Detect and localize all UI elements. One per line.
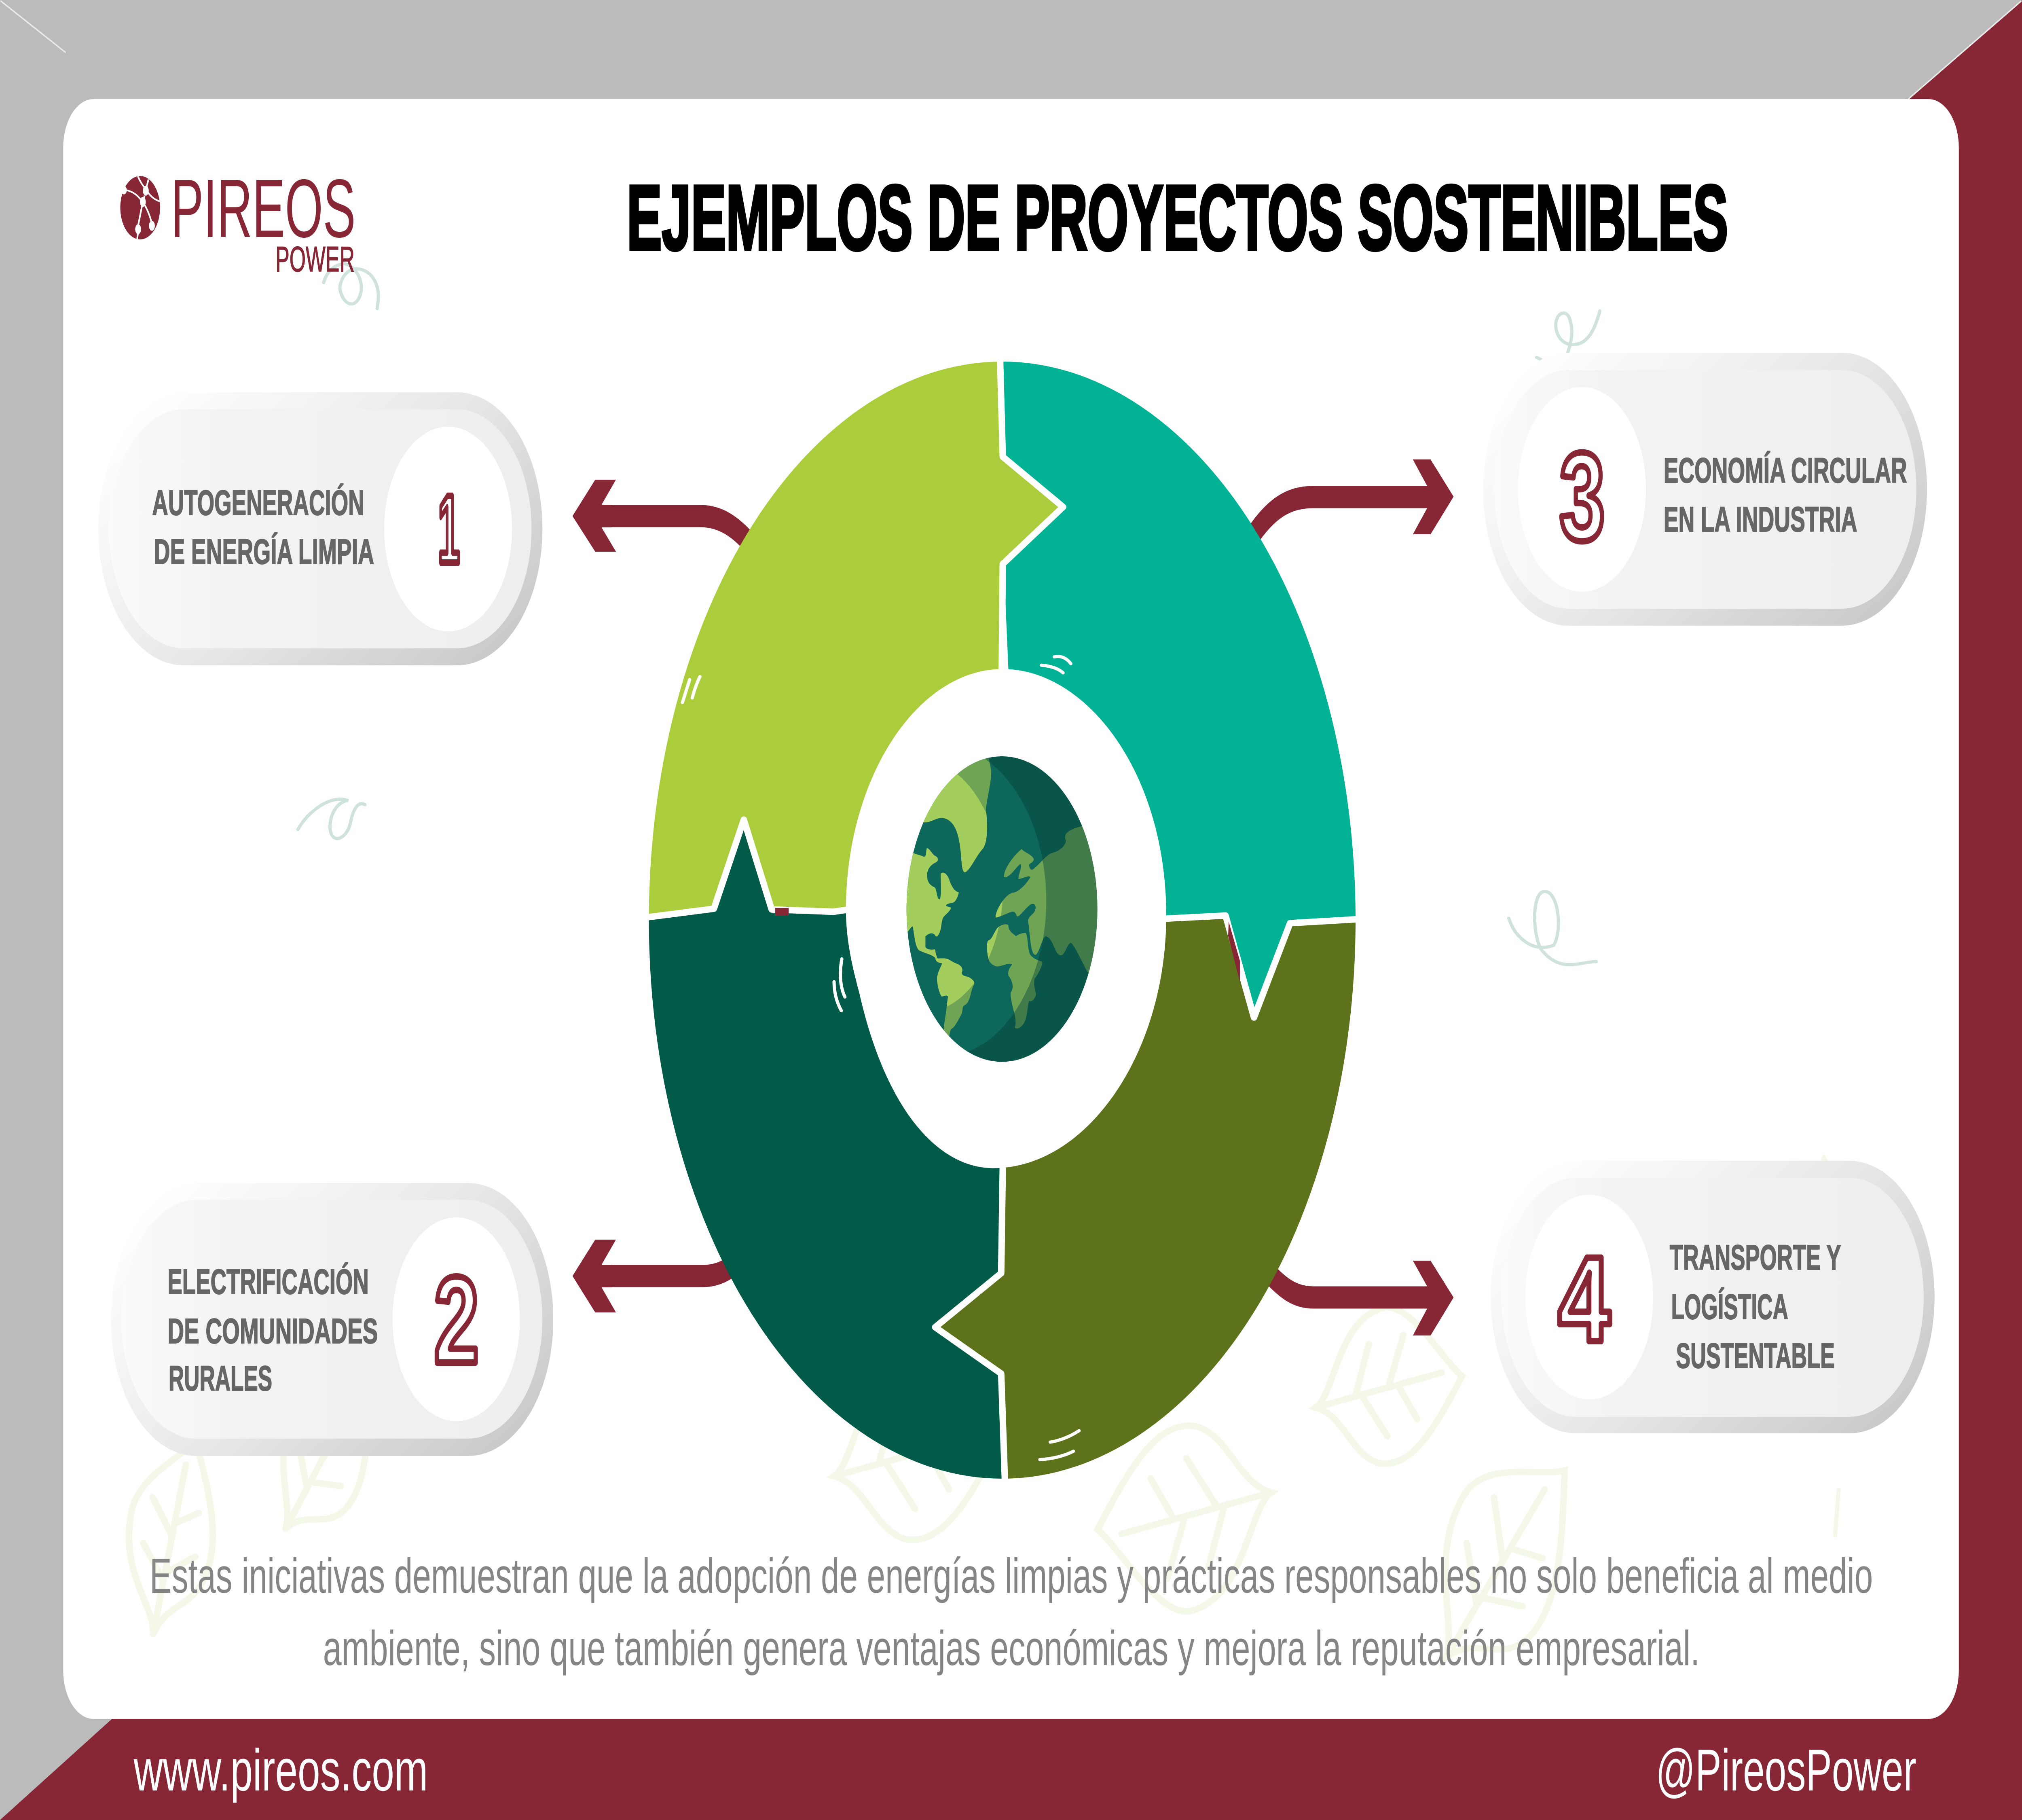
segment: dark green xyxy=(649,824,1003,1479)
label 2: DE COMUNIDADES xyxy=(167,1312,378,1351)
text block: conclusion: Estas iniciativas demuestran que la adopción de energías limpias y prácticas responsables no solo beneficia al medio xyxy=(150,1548,1873,1603)
segment: teal xyxy=(1000,362,1356,1018)
label 2 xyxy=(167,1262,378,1398)
label 1: AUTOGENERACIÓN xyxy=(152,483,364,523)
highlight strokes xyxy=(682,656,1079,1460)
logo: Pireos Power xyxy=(120,162,355,279)
center hole xyxy=(846,669,1166,1168)
decorative swirls xyxy=(298,264,1600,965)
label 3: ECONOMÍA CIRCULAR xyxy=(1664,451,1907,490)
label 2: RURALES xyxy=(169,1359,272,1398)
label 4: TRANSPORTE Y xyxy=(1670,1238,1841,1277)
text block: conclusion: ambiente, sino que también genera ventajas económicas y mejora la reputación empresarial. xyxy=(323,1621,1700,1676)
segment: light green xyxy=(649,362,1062,916)
arrow: to item 3 xyxy=(1251,459,1453,538)
segment: olive xyxy=(935,917,1356,1479)
label 4: SUSTENTABLE xyxy=(1676,1336,1835,1376)
label 1: DE ENERGÍA LIMPIA xyxy=(154,532,374,571)
label 2: ELECTRIFICACIÓN xyxy=(167,1262,369,1302)
number 1: 1 xyxy=(438,475,460,584)
arrow: to item 4 xyxy=(1266,1261,1453,1335)
label 3 xyxy=(1664,451,1907,539)
label 3: EN LA INDUSTRIA xyxy=(1664,500,1857,539)
icon: earth globe xyxy=(907,756,1098,1062)
logo subtitle: POWER xyxy=(275,239,355,279)
decorative leaves watermark xyxy=(108,1157,1848,1714)
title: EJEMPLOS DE PROYECTOS SOSTENIBLES xyxy=(627,167,1728,269)
text block: conclusion xyxy=(150,1548,1873,1676)
number 2: 2 xyxy=(434,1251,479,1389)
footer: website: www.pireos.com xyxy=(133,1737,428,1803)
logo icon: network ball xyxy=(120,176,160,239)
label 1 xyxy=(152,483,374,571)
seam slivers xyxy=(775,908,1240,982)
chart: circular four-segment wheel xyxy=(649,362,1356,1479)
logo wordmark: PIREOS xyxy=(171,162,355,255)
panel: item 3 xyxy=(1483,353,1927,626)
label 4 xyxy=(1670,1238,1841,1376)
footer: social handle: @PireosPower xyxy=(1656,1737,1916,1803)
arrow: to item 1 xyxy=(573,480,751,552)
number 3: 3 xyxy=(1559,426,1605,567)
arrow: to item 2 xyxy=(573,1240,738,1312)
number 4: 4 xyxy=(1558,1232,1610,1367)
panel: item 2 xyxy=(111,1183,553,1456)
label 4: LOGÍSTICA xyxy=(1671,1287,1788,1327)
panel: item 1 xyxy=(98,392,542,665)
panel: item 4 xyxy=(1491,1161,1935,1433)
segment separators xyxy=(649,362,1356,1479)
